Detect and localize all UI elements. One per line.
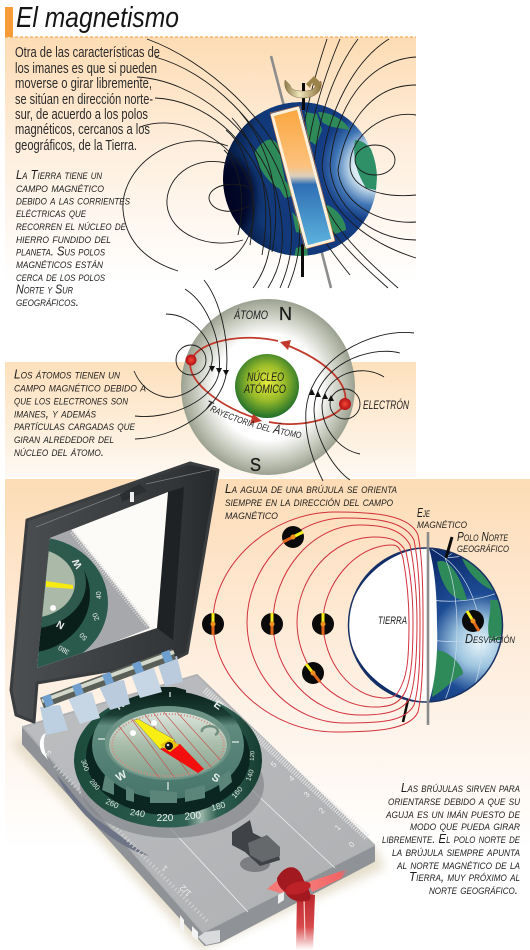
atom labels: ÁTOMO: [233, 307, 268, 322]
diagram labels: geográfico: [457, 540, 509, 555]
diagram labels: Polo Norte: [457, 529, 509, 544]
field lines: right electron: [306, 332, 414, 481]
atom labels: N: [279, 304, 292, 324]
atom labels: Trayectoria del Átomo: [206, 400, 302, 438]
mirror with reflection: N: [55, 618, 67, 631]
text: earth magnetic field: magnéticos están: [16, 256, 103, 271]
bezel with degrees: [74, 692, 262, 828]
text: atoms: que los electrones son: [14, 392, 128, 408]
mirror with reflection: 380: [57, 643, 71, 655]
text: compasses: modo que pueda girar: [410, 818, 520, 833]
rotating ring: W: [114, 768, 130, 784]
field lines: right: [298, 39, 416, 288]
field lines: left electron: [134, 280, 229, 439]
globe: [348, 548, 505, 702]
text: compasses: aguja es un imán puesto de: [385, 806, 521, 821]
mirror with reflection: 40: [96, 591, 103, 599]
atomic nucleus: ATÓMICO: [243, 381, 286, 396]
red cord: [267, 867, 348, 950]
text: compasses: [382, 780, 521, 897]
bezel with degrees: 160: [230, 785, 245, 800]
text: earth magnetic field: campo magnético: [16, 180, 104, 195]
rotating ring: N: [114, 698, 127, 713]
diagram labels: magnético: [417, 516, 467, 531]
icon: grey geographic axis: [271, 56, 331, 288]
icon: geographic north pole: [446, 537, 452, 558]
intro text: [15, 44, 160, 154]
baseplate: [23, 675, 374, 945]
text: earth magnetic field: La Tierra tiene un: [16, 167, 102, 182]
panel: compass background: [5, 479, 530, 849]
text: earth magnetic field: recorren el núcleo de: [16, 218, 127, 233]
title: El magnetismo: [16, 2, 179, 34]
electrons: [176, 345, 360, 419]
text: earth magnetic field: cerca de los polos: [16, 269, 105, 284]
magnetic field lines: [213, 512, 423, 732]
intro text: magnéticos, cercanos a los: [15, 121, 150, 138]
text: atoms: partículas cargadas que: [14, 418, 136, 433]
mirror with reflection: W: [70, 556, 85, 570]
hinges: [40, 652, 183, 735]
text: compasses: Tierra, muy próximo al: [409, 869, 520, 884]
intro text: Otra de las características de: [15, 44, 160, 61]
capsule: [105, 706, 231, 785]
bezel with degrees: 140: [245, 769, 256, 782]
text: atoms: [14, 366, 146, 459]
baseplate: 3: [302, 790, 312, 799]
intro text: se sitúan en dirección norte-: [15, 91, 153, 108]
bezel with degrees: 120: [250, 750, 256, 761]
baseplate: 5: [269, 760, 279, 769]
atomic nucleus: NÚCLEO: [247, 369, 284, 384]
text: compass needle: La aguja de una brújula se orienta: [225, 481, 397, 496]
earth with bar magnet: [123, 39, 416, 288]
atom labels: ELECTRÓN: [363, 397, 409, 412]
text: earth magnetic field: [16, 167, 130, 309]
globe outline: [348, 548, 502, 702]
atom diagram: [134, 280, 414, 482]
atomic nucleus: [235, 354, 299, 418]
text: compass needle: [225, 481, 397, 522]
text: earth magnetic field: hierro fundido del: [16, 231, 111, 246]
rotating ring: [92, 687, 244, 803]
icon: magnetic axis: [427, 532, 429, 725]
intro text: los imanes es que si pueden: [15, 60, 157, 77]
intro text: sur, de acuerdo a los polos: [15, 106, 148, 123]
electron orbit: [190, 338, 346, 424]
atom labels: S: [250, 455, 261, 475]
baseplate: 0: [347, 840, 357, 849]
sighting clip: [232, 820, 280, 872]
text: atoms: núcleo del átomo.: [14, 444, 104, 459]
compass needles: [202, 526, 484, 684]
diagram labels: Desviación: [465, 631, 515, 646]
baseplate: 1: [160, 863, 169, 873]
rotating ring: S: [209, 771, 222, 785]
text: compasses: al norte magnético de la: [396, 857, 520, 872]
diagram labels: TIERRA: [378, 615, 407, 627]
mirror with reflection: 20: [92, 612, 101, 621]
text: atoms: campo magnético debido a: [14, 380, 146, 394]
compass shadow on plate: [80, 732, 264, 838]
diagram labels: Eje: [417, 505, 431, 520]
lid frame: [11, 463, 218, 722]
white cutaway hemisphere: [348, 548, 437, 702]
text: earth magnetic field: planeta. Sus polos: [16, 244, 105, 258]
icon: rotation arrow: [285, 76, 322, 98]
earth cutaway diagram: [202, 505, 515, 732]
mirror with reflection: [37, 492, 168, 668]
rotating ring: E: [211, 699, 224, 713]
bezel with degrees: 280: [88, 778, 101, 792]
text: compass needle: siempre en la dirección del campo: [225, 494, 393, 509]
text: compass needle: magnético: [225, 507, 278, 522]
text: compasses: norte geográfico.: [429, 882, 518, 897]
text: earth magnetic field: geográficos.: [16, 294, 79, 309]
diagram labels: [378, 505, 515, 646]
compass: [0, 463, 385, 950]
panel: atom background: [5, 362, 416, 478]
compass needle: [134, 719, 204, 773]
baseplate: 1/2: [177, 883, 193, 899]
panel: top background: [5, 37, 416, 282]
baseplate: 2: [317, 806, 327, 815]
text: earth magnetic field: Norte y Sur: [16, 282, 73, 296]
baseplate: 3: [44, 748, 53, 758]
field lines: left: [123, 39, 300, 288]
intro text: geográficos, de la Tierra.: [15, 137, 137, 154]
earth globe: [223, 102, 377, 256]
text: compasses: la brújula siempre apunta: [392, 844, 520, 859]
text: earth magnetic field: debido a las corrientes: [16, 192, 130, 208]
atom sphere: [181, 299, 355, 475]
bezel with degrees: 300: [79, 759, 90, 772]
icon: black magnetic axis: [302, 83, 304, 277]
intro text: moverse o girar libremente,: [15, 75, 152, 92]
bezel with degrees: 260: [104, 797, 121, 811]
text: atoms: giran alrededor del: [14, 431, 114, 446]
mirror with reflection: 50: [79, 631, 89, 641]
text: atoms: Los átomos tienen un: [14, 366, 120, 382]
baseplate: 1: [333, 823, 343, 832]
bezel with degrees: 240: [129, 807, 146, 819]
atom labels: [206, 304, 409, 475]
bezel with degrees: 220: [157, 813, 174, 824]
bezel with degrees: 200: [184, 810, 202, 823]
bezel with degrees: 180: [210, 799, 227, 813]
text: earth magnetic field: eléctricas que: [16, 205, 87, 220]
text: atoms: imanes, y además: [14, 406, 96, 420]
icon: bar magnet: [270, 106, 335, 249]
baseplate: 4: [287, 774, 297, 783]
text: compasses: orientarse debido a que su: [388, 793, 520, 808]
title: [5, 2, 416, 37]
plate shadow: [12, 735, 385, 950]
icon: geographic south pole: [403, 700, 408, 722]
